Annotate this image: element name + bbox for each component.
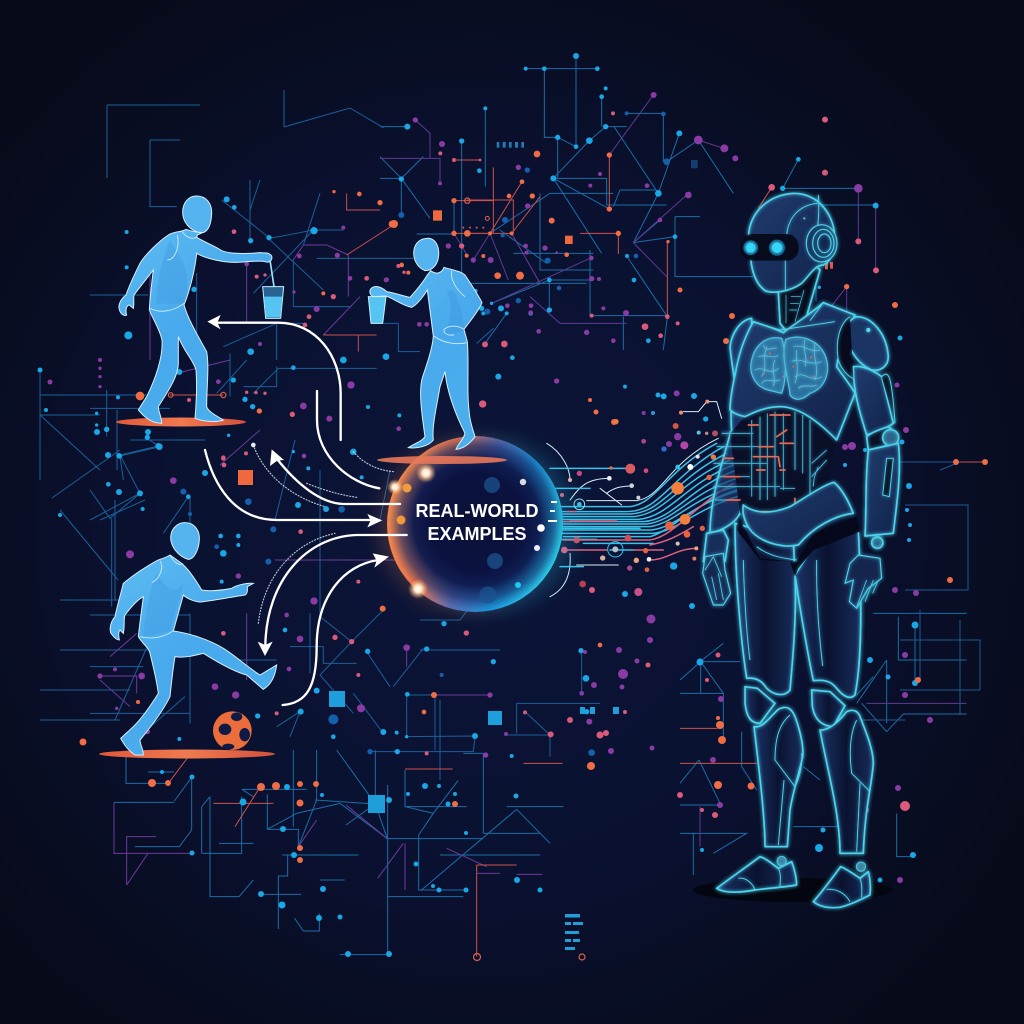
brain [751, 337, 828, 399]
viewer-right upper arm [853, 366, 893, 435]
abdomen [730, 408, 837, 517]
pelvis [743, 482, 853, 546]
nodes: around upper figures [95, 190, 535, 459]
wrist [872, 537, 883, 548]
platform: top left [116, 418, 246, 426]
arrows: curved flows between people and sphere [205, 315, 407, 705]
sphere body [387, 436, 563, 612]
robot lower body [717, 523, 873, 908]
arrow from kicker [283, 553, 389, 705]
viewer-left arm [710, 427, 747, 533]
ring connectors [574, 499, 585, 510]
nodes: cyan [38, 336, 918, 957]
network: far right brackets [855, 462, 985, 720]
arrow to pouring person [207, 315, 341, 440]
left thigh [735, 523, 795, 695]
head [748, 193, 835, 292]
network: around the upper figures [90, 180, 540, 480]
abdomen circuit [713, 412, 827, 500]
arrow from glass holder [317, 391, 379, 488]
glass [368, 297, 386, 323]
head [414, 238, 439, 271]
glowing eyes [743, 240, 785, 256]
robot hands [703, 553, 882, 608]
figure: person pouring water [119, 196, 284, 423]
right shin [820, 710, 873, 853]
chest [730, 303, 855, 440]
hand right [845, 555, 882, 608]
network: upper centre and right [380, 56, 876, 350]
right thigh [795, 530, 861, 697]
robot upper body [703, 193, 899, 577]
hand left [703, 553, 731, 605]
thin white branches [547, 402, 722, 597]
nodes: coloured scatter lower and right [48, 288, 988, 883]
left foot [717, 857, 797, 892]
neck [778, 263, 820, 332]
pink flow curves [550, 483, 733, 560]
head [183, 196, 212, 233]
forearm [865, 443, 899, 536]
network: mid left and bottom centre [90, 446, 600, 757]
arrow down to kicker [258, 535, 407, 656]
squares: coloured markers [238, 470, 619, 813]
sphere glow [379, 439, 551, 611]
network: right side [680, 613, 967, 875]
arrow up left [270, 449, 400, 504]
thigh seams [743, 560, 823, 666]
sphere sparks [387, 463, 557, 599]
water stream [270, 260, 274, 287]
shading and seams [143, 573, 183, 637]
inner bubbles [480, 477, 503, 604]
dotted guide curves [253, 445, 393, 623]
right knee [812, 690, 845, 727]
cyan flow curves [550, 443, 763, 567]
visor [740, 234, 799, 261]
robot shadow [693, 878, 893, 902]
figure: person kicking ball [110, 523, 277, 755]
shading and seams [443, 290, 464, 337]
nodes: mid left and bottom centre [97, 443, 602, 758]
arrow into sphere [205, 450, 382, 527]
head [171, 523, 199, 559]
sphere label: REAL-WORLD [416, 501, 538, 521]
soccer ball [213, 711, 252, 750]
left knee [745, 687, 775, 723]
sphere: real-world examples [379, 436, 576, 612]
body [370, 267, 482, 449]
network: left side [40, 90, 500, 780]
elbow [867, 427, 897, 450]
viewer-left forearm and wrist [703, 530, 728, 562]
body [119, 229, 272, 423]
body [110, 555, 277, 755]
data stream from sphere to robot [547, 378, 763, 597]
network: lower area [114, 750, 563, 957]
text-like list icon at bottom [474, 914, 585, 960]
platform: centre [377, 456, 507, 464]
viewer-left shoulder [730, 318, 752, 432]
glass [263, 287, 284, 318]
figure: person holding glass on sphere [368, 238, 482, 449]
nodes: upper right cluster [378, 53, 879, 347]
robot [703, 193, 899, 908]
platform: bottom left [99, 750, 275, 758]
sphere: real-world examples: EXAMPLES [427, 524, 527, 544]
right foot [813, 867, 870, 908]
ear module [806, 225, 837, 262]
shading and seams [157, 240, 187, 304]
ankles [777, 856, 786, 866]
left shin [754, 707, 803, 847]
flow nodes [554, 378, 718, 596]
black hip band [737, 517, 860, 577]
shoulder cap [846, 317, 888, 370]
